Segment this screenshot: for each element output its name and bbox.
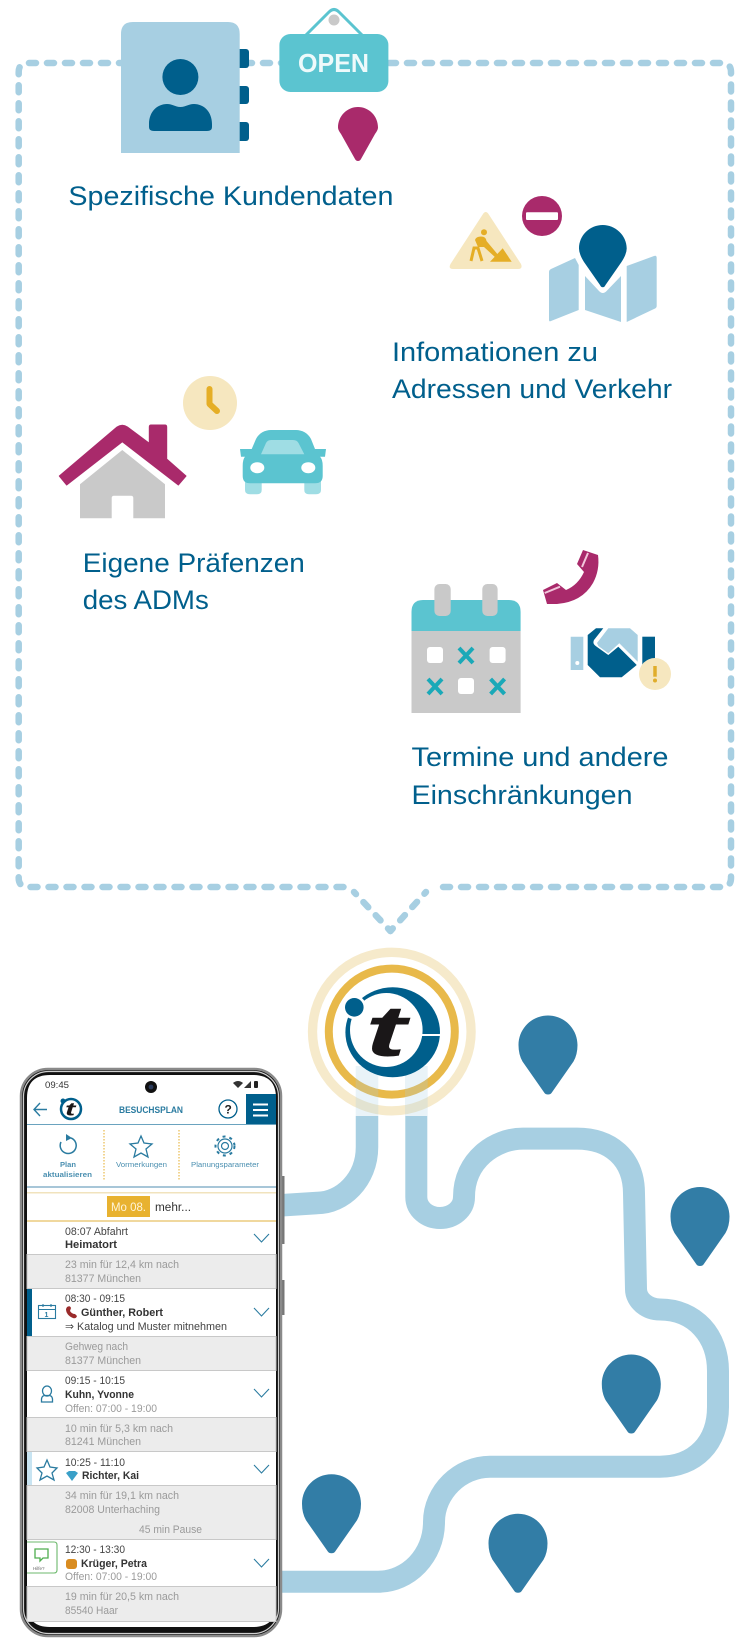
date row <box>27 1196 276 1222</box>
row: Krüger, Petra <box>27 1542 269 1583</box>
small logo: t <box>65 1100 77 1120</box>
icon: magenta pin <box>338 107 378 161</box>
phone body <box>21 1069 281 1636</box>
travel: Gehweg: Gehweg nach <box>65 1341 128 1353</box>
row: Kuhn, Yvonne <box>42 1375 269 1415</box>
row: Günther, Robert: ⇒ Katalog und Muster mitnehmen <box>65 1321 227 1333</box>
icon: calendar <box>412 584 521 713</box>
logo with rings: t <box>365 991 411 1072</box>
heading: Termine und andere Einschränkungen: Termine und andere <box>412 742 668 772</box>
pin 4 <box>302 1474 361 1553</box>
side buttons <box>281 1176 284 1315</box>
row: Heimatort: 08:07 Abfahrt <box>65 1226 128 1238</box>
heading: Eigene Präferenzen des ADMs: Eigene Präfenzen <box>83 548 305 578</box>
toolbar: Vormerkungen <box>116 1162 167 1169</box>
phone screen <box>27 1075 276 1627</box>
travel: Gehweg: 81377 München <box>65 1355 141 1367</box>
icon: open sign: OPEN <box>298 48 369 78</box>
dashed speech bubble panel <box>19 63 731 931</box>
icon: map with pin <box>549 225 657 322</box>
row: Heimatort <box>65 1226 269 1251</box>
toolbar: Planungsparameter <box>191 1162 260 1169</box>
pin 5 <box>488 1514 548 1593</box>
heading: Informationen zu Adressen und Verkehr: Adressen und Verkehr <box>392 374 672 404</box>
route to phone <box>270 1116 367 1206</box>
row: Richter, Kai: Richter, Kai <box>82 1470 139 1482</box>
travel: 34 min and pause <box>65 1490 202 1536</box>
travel: 34 min and pause: 82008 Unterhaching <box>65 1504 160 1516</box>
gray travel bands <box>27 1254 276 1622</box>
row: Krüger, Petra: 12:30 - 13:30 <box>65 1544 125 1556</box>
travel: 19 min <box>65 1591 179 1617</box>
icon: road works sign <box>450 212 522 269</box>
travel: 10 min: 81241 München <box>65 1436 141 1448</box>
date row: mehr... <box>155 1202 191 1214</box>
heading: Spezifische Kundendaten: Spezifische Kundendaten <box>68 181 393 211</box>
travel: 19 min: 85540 Haar <box>65 1605 118 1617</box>
row: Richter, Kai <box>27 1452 269 1485</box>
icon: clock <box>183 376 237 430</box>
help badge <box>27 1542 57 1573</box>
travel: 19 min: 19 min für 20,5 km nach <box>65 1591 179 1603</box>
travel: 10 min: 10 min für 5,3 km nach <box>65 1423 173 1435</box>
icon: car <box>240 430 326 494</box>
pin 2 <box>670 1187 730 1266</box>
heading: Informationen zu Adressen und Verkehr: Infomationen zu <box>392 337 598 367</box>
travel: 23 min: 81377 München <box>65 1273 141 1285</box>
toolbar <box>27 1130 276 1194</box>
icon: house <box>59 425 186 518</box>
heading: Informationen zu Adressen und Verkehr <box>392 337 672 404</box>
travel: Gehweg <box>65 1341 141 1367</box>
icon: telephone handset <box>543 550 598 604</box>
row: Richter, Kai: 10:25 - 11:10 <box>65 1457 125 1469</box>
travel: 10 min <box>65 1423 173 1448</box>
row: Günther, Robert <box>27 1289 269 1336</box>
row: Heimatort: Heimatort <box>65 1239 117 1251</box>
icon: address book <box>121 22 249 153</box>
pin 3 <box>602 1354 661 1434</box>
row: Kuhn, Yvonne: Kuhn, Yvonne <box>65 1389 134 1401</box>
status bar <box>45 1080 258 1093</box>
row: Günther, Robert: 1 <box>44 1312 48 1319</box>
travel: 23 min: 23 min für 12,4 km nach <box>65 1259 179 1271</box>
travel: 34 min and pause: 45 min Pause <box>139 1524 202 1536</box>
heading: Termine und andere Einschränkungen <box>412 742 668 810</box>
toolbar: Plan <box>60 1162 76 1169</box>
heading: Eigene Präferenzen des ADMs: des ADMs <box>83 585 209 615</box>
heading: Termine und andere Einschränkungen: Einschränkungen <box>412 780 632 810</box>
winding route <box>270 1116 718 1582</box>
logo with rings <box>312 952 471 1116</box>
travel: 23 min <box>65 1259 179 1285</box>
row: Kuhn, Yvonne: 09:15 - 10:15 <box>65 1375 125 1387</box>
icon: no entry sign <box>522 196 562 236</box>
row: Krüger, Petra: Offen: 07:00 - 19:00 <box>65 1571 157 1583</box>
help badge: Hilfe? <box>33 1566 45 1571</box>
icon: handshake with warning <box>571 628 671 690</box>
map pins <box>302 1016 730 1593</box>
row: Günther, Robert: Günther, Robert <box>81 1307 163 1319</box>
heading: Eigene Präferenzen des ADMs <box>83 548 305 615</box>
app header: ? <box>224 1102 232 1116</box>
pin 1 <box>518 1016 578 1094</box>
row: Krüger, Petra: Krüger, Petra <box>81 1558 148 1570</box>
status bar: 09:45 <box>45 1080 69 1091</box>
toolbar: aktualisieren <box>43 1172 92 1179</box>
travel: 34 min and pause: 34 min für 19,1 km nach <box>65 1490 179 1502</box>
icon: open sign <box>279 10 388 92</box>
small logo <box>60 1098 81 1120</box>
row: Kuhn, Yvonne: Offen: 07:00 - 19:00 <box>65 1403 157 1415</box>
app header <box>27 1094 276 1125</box>
app header: BESUCHSPLAN <box>119 1105 183 1116</box>
row: Günther, Robert: 08:30 - 09:15 <box>65 1293 125 1305</box>
date row: Mo 08. <box>111 1202 146 1214</box>
phone mockup <box>21 1069 284 1636</box>
